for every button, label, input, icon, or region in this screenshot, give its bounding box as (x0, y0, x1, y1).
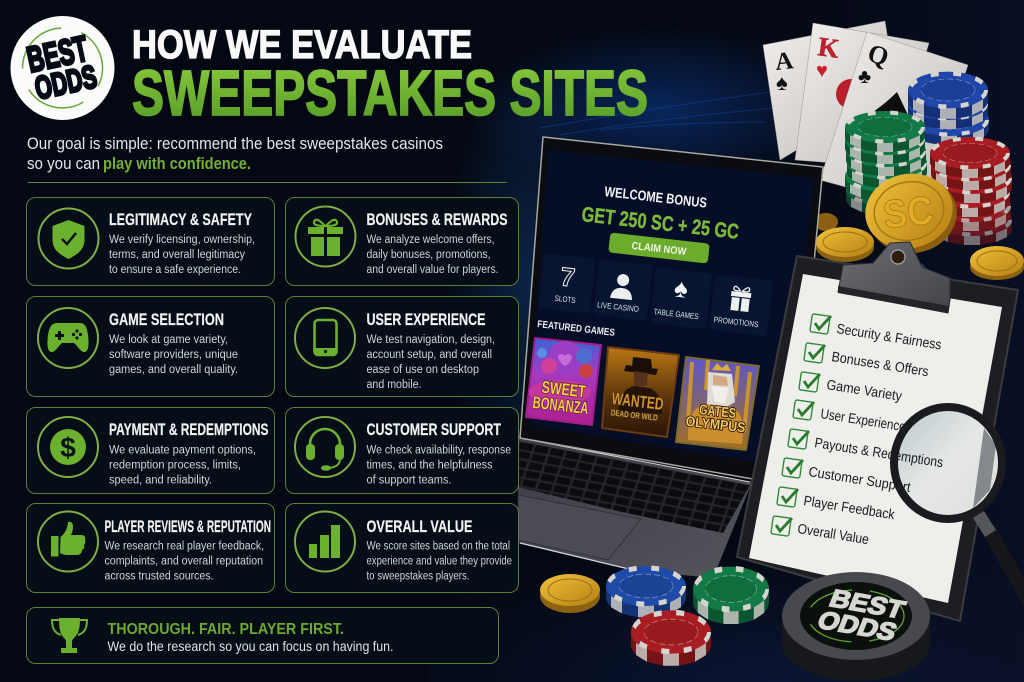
best odds puck: BEST (825, 585, 909, 624)
panel: bonuses and rewards: daily bonuses, promotions, (366, 249, 490, 261)
game: wanted dead or wild: DEAD OR WILD (610, 407, 658, 423)
checklist items: Overall Value (797, 520, 870, 547)
panel: closing banner: We do the research so you can focus on having fun. (108, 639, 394, 654)
game title: WANTED (611, 389, 665, 414)
logo badge (8, 14, 117, 122)
game: sweet bonanza (526, 338, 601, 425)
laptop (518, 137, 823, 578)
panel: player reviews and reputation (26, 504, 274, 592)
panel: player reviews and reputation: complaints, and overall reputation (104, 556, 263, 568)
coin: SC (858, 166, 964, 261)
icon: dollar coin: $ (60, 432, 76, 463)
panel: user experience (286, 296, 518, 396)
panel: user experience: and mobile. (366, 379, 422, 391)
checklist items (797, 320, 944, 547)
icon: shield (52, 220, 84, 259)
laptop base (518, 438, 752, 578)
panel: game selection: GAME SELECTION (109, 310, 224, 329)
tile: slots (538, 253, 596, 314)
title: SWEEPSTAKES SITES (132, 57, 648, 129)
card: queen of clubs (820, 32, 968, 210)
chip stack: red (930, 137, 1012, 245)
panel: overall value: experience and value they provide (366, 556, 512, 568)
coin: small right (970, 246, 1024, 280)
panel: overall value: to sweepstakes players. (366, 570, 470, 582)
panel: closing banner (26, 608, 498, 664)
panel: legitimacy and safety: LEGITIMACY & SAFETY (109, 210, 252, 229)
checklist items: Player Feedback (803, 492, 897, 522)
chip: blue (606, 566, 686, 617)
tile: promotions (709, 274, 773, 336)
clipboard board (737, 256, 1018, 621)
chip: green (693, 567, 769, 624)
tile: live casino (593, 259, 653, 321)
panel: customer support: times, and the helpfulness (366, 460, 493, 472)
intro text: so you can (27, 155, 100, 173)
metal clip (838, 242, 950, 313)
game: gates of olympus (676, 357, 759, 450)
panel: payment and redemptions: We evaluate payment options, (109, 444, 256, 456)
coin: SC: SC (881, 189, 935, 237)
card: ace of spades: A (774, 47, 795, 76)
panel: overall value (286, 504, 518, 592)
panel: user experience: ease of use on desktop (366, 364, 479, 376)
checklist items: Customer Support (808, 463, 912, 495)
panel: payment and redemptions (26, 408, 274, 494)
intro text: Our goal is simple: recommend the best sweepstakes casinos (27, 135, 443, 153)
game: wanted dead or wild (602, 347, 679, 437)
panel: payment and redemptions: PAYMENT & REDEMPTIONS (109, 420, 268, 439)
card: ace of spades (763, 21, 888, 160)
welcome bonus heading: WELCOME BONUS (604, 183, 708, 211)
tabletop chips and coin (540, 566, 769, 666)
icon: bar chart (309, 525, 340, 558)
logo badge: BEST (23, 27, 92, 80)
title: HOW WE EVALUATE (132, 23, 472, 67)
coin: small left (816, 227, 874, 262)
card: king of hearts: K (816, 31, 841, 64)
panel: bonuses and rewards: and overall value for players. (366, 264, 498, 276)
magnifier lens (896, 409, 1000, 517)
panel: payment and redemptions: speed, and reliability. (109, 474, 212, 486)
panel: bonuses and rewards: BONUSES & REWARDS (366, 210, 508, 229)
panel: user experience: USER EXPERIENCE (366, 310, 486, 329)
checklist items: User Experience (820, 405, 907, 434)
coin: background (814, 213, 838, 231)
panel: customer support: CUSTOMER SUPPORT (366, 420, 501, 439)
panel: game selection (26, 296, 274, 396)
panel: bonuses and rewards (286, 198, 518, 286)
icon: headset (306, 429, 344, 471)
card: king of hearts: ♥ (816, 60, 828, 82)
card: king of hearts (795, 23, 929, 165)
best odds puck: ODDS (813, 607, 901, 646)
panel: game selection: We look at game variety, (109, 334, 228, 346)
tile: table games: ♠ (673, 272, 690, 304)
chip stack: blue (908, 72, 989, 145)
panel: player reviews and reputation: across trusted sources. (104, 570, 214, 582)
checklist items: Security & Fairness (836, 320, 943, 353)
claim now button: CLAIM NOW (631, 240, 687, 258)
card: queen of clubs: Q (864, 38, 892, 72)
game title: GATES (698, 401, 737, 421)
game: sweet bonanza: BONANZA (532, 393, 590, 418)
clipboard with checklist (737, 242, 1024, 621)
card: queen of clubs: ♣ (858, 66, 871, 88)
panel: customer support (286, 408, 518, 494)
title (132, 23, 648, 129)
panel: legitimacy and safety (26, 198, 274, 286)
panel: game selection: software providers, unique (109, 349, 238, 361)
icon: gamepad (47, 323, 89, 352)
divider (28, 182, 507, 184)
panel: legitimacy and safety: terms, and overall legitimacy (109, 249, 245, 261)
checkboxes (771, 314, 831, 536)
icon: thumbs up (51, 522, 85, 556)
claim now button (608, 232, 710, 264)
icon: trophy (52, 618, 87, 653)
right of lens: board seen through glass (973, 428, 996, 508)
icon: gift (308, 220, 343, 256)
game title: SWEET (541, 378, 587, 402)
laptop screen (520, 137, 823, 486)
tile: table games (650, 267, 712, 329)
checklist items: Game Variety (826, 376, 903, 404)
tile: promotions: PROMOTIONS (713, 315, 759, 329)
panel: legitimacy and safety: We verify licensing, ownership, (109, 234, 255, 246)
panel: customer support: We check availability, response (366, 444, 511, 456)
tile: slots: 7 (559, 261, 577, 293)
paper (749, 274, 1002, 603)
logo badge: ODDS (32, 58, 100, 106)
intro text: play with confidence. (103, 155, 251, 173)
checklist items: Payouts & Redemptions (814, 434, 944, 470)
poker chip stacks (845, 72, 1012, 245)
panel: customer support: of support teams. (366, 474, 452, 486)
tile: table games: TABLE GAMES (653, 307, 699, 321)
playing cards (763, 21, 968, 210)
icon: dollar coin (50, 429, 86, 465)
panel: overall value: We score sites based on the total (366, 540, 510, 552)
magnifying glass (894, 407, 1024, 607)
panel: user experience: We test navigation, design, (366, 334, 495, 346)
panel: bonuses and rewards: We analyze welcome offers, (366, 234, 494, 246)
panel: player reviews and reputation: We research real player feedback, (104, 540, 264, 552)
panel: overall value: OVERALL VALUE (366, 517, 472, 536)
checklist items: Bonuses & Offers (831, 348, 930, 379)
featured games heading: FEATURED GAMES (537, 319, 616, 339)
intro text (27, 135, 443, 173)
card: ace of spades: ♠ (776, 70, 788, 95)
gold coins (814, 166, 1024, 280)
panel: game selection: games, and overall quality. (109, 364, 238, 376)
coin: tabletop (540, 574, 600, 613)
panel: payment and redemptions: redemption process, limits, (109, 460, 241, 472)
panel: user experience: account setup, and overall (366, 349, 492, 361)
best odds puck (782, 572, 930, 681)
game: gates of olympus: OLYMPUS (685, 413, 746, 435)
chip: red (631, 610, 711, 666)
icon: smartphone (314, 320, 337, 356)
panel: player reviews and reputation: PLAYER REVIEWS & REPUTATION (104, 517, 271, 536)
panel: legitimacy and safety: to ensure a safe experience. (109, 264, 241, 276)
tile: live casino: LIVE CASINO (597, 300, 639, 314)
tile: slots: SLOTS (554, 294, 576, 305)
bonus amount: GET 250 SC + 25 GC (580, 203, 740, 244)
panel: closing banner: THOROUGH. FAIR. PLAYER FIRST. (108, 621, 344, 638)
chip stack: green (845, 111, 927, 215)
